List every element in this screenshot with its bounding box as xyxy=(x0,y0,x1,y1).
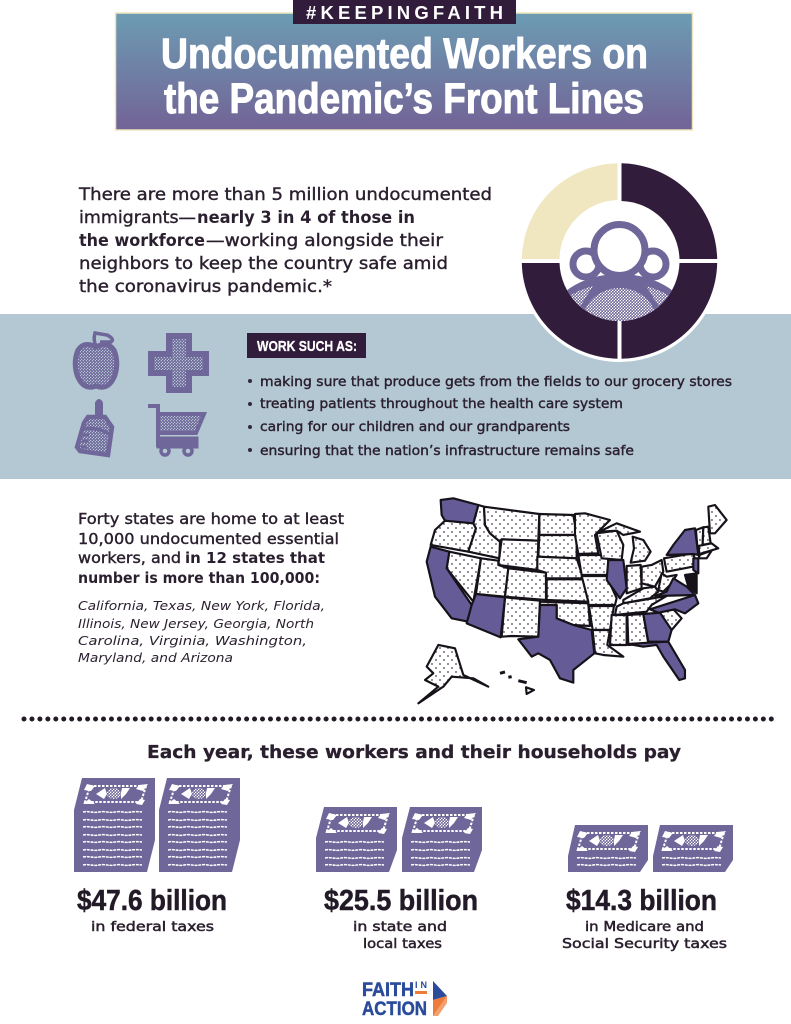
intro text: neighbors to keep the country safe amid xyxy=(79,254,448,274)
icon: cash stacks xyxy=(568,825,733,872)
intro text: immigrants— xyxy=(79,208,196,228)
work such as list xyxy=(247,333,732,459)
tax stat: Medicare and Social Security: in Medicare and xyxy=(585,919,704,935)
states text: Maryland, and Arizona xyxy=(78,651,233,665)
work such as list: making sure that produce gets from the fields to our grocery stores xyxy=(260,375,732,390)
logo: Faith in Action: IN xyxy=(415,980,427,990)
tax stat: federal: $47.6 billion xyxy=(77,885,227,917)
logo: Faith in Action: ACTION xyxy=(362,999,427,1020)
title: the Pandemic’s Front Lines xyxy=(164,75,644,123)
icon: cash stacks xyxy=(316,807,482,872)
tax stat: state and local: in state and xyxy=(353,919,447,935)
states text: California, Texas, New York, Florida, xyxy=(78,599,325,613)
intro text: There are more than 5 million undocumented xyxy=(78,185,492,205)
intro text: nearly 3 in 4 of those in xyxy=(197,208,415,228)
work such as list: caring for our children and our grandparents xyxy=(260,420,570,435)
icon: people xyxy=(567,221,672,321)
intro text: the workforce xyxy=(79,231,205,251)
icon: medical cross xyxy=(151,336,206,390)
dotted divider xyxy=(24,716,778,722)
states text: in 12 states that xyxy=(185,550,325,567)
icon: apple xyxy=(75,333,117,387)
tax stat: state and local xyxy=(316,807,482,952)
states over 100,000 xyxy=(427,498,698,683)
icon: shopping cart xyxy=(148,406,204,455)
blue band xyxy=(0,314,791,479)
title: Undocumented Workers on xyxy=(161,30,648,78)
heading: taxes: Each year, these workers and their households pay xyxy=(147,742,681,763)
logo: Faith in Action: FAITH xyxy=(362,980,414,1001)
states text: number is more than 100,000: xyxy=(78,570,320,587)
states text: workers, and xyxy=(78,550,181,567)
intro text xyxy=(78,185,492,297)
tax stat: state and local: local taxes xyxy=(363,936,442,952)
tax stat: federal xyxy=(74,778,240,935)
states text: Illinois, New Jersey, Georgia, North xyxy=(78,617,314,631)
tax stat: federal: in federal taxes xyxy=(91,919,214,935)
intro text: —working alongside their xyxy=(206,231,443,251)
hashtag tag: #KEEPINGFAITH xyxy=(306,2,503,23)
tax stat: state and local: $25.5 billion xyxy=(324,885,478,917)
states text: 10,000 undocumented essential xyxy=(78,531,339,548)
icon: cash stacks xyxy=(74,778,240,872)
donut chart: nearly 3 in 4 xyxy=(518,160,720,370)
logo: Faith in Action xyxy=(362,980,447,1020)
map: US states xyxy=(418,498,727,703)
states text xyxy=(78,511,344,665)
states text: Forty states are home to at least xyxy=(78,511,344,528)
title xyxy=(161,30,648,123)
intro text: the coronavirus pandemic.* xyxy=(79,277,332,297)
heading: work such as xyxy=(247,333,366,358)
heading: work such as: WORK SUCH AS: xyxy=(257,338,357,355)
tax stat: Medicare and Social Security: Social Security taxes xyxy=(562,936,727,952)
work such as list: ensuring that the nation’s infrastructure remains safe xyxy=(260,444,634,459)
states text: Carolina, Virginia, Washington, xyxy=(78,634,307,648)
icon: baby bottle xyxy=(77,400,112,455)
icons: work types xyxy=(75,333,206,455)
tax stat: Medicare and Social Security: $14.3 billion xyxy=(566,885,717,917)
title banner xyxy=(116,0,692,130)
work such as list: treating patients throughout the health care system xyxy=(260,397,623,412)
tax stat: Medicare and Social Security xyxy=(562,825,733,952)
